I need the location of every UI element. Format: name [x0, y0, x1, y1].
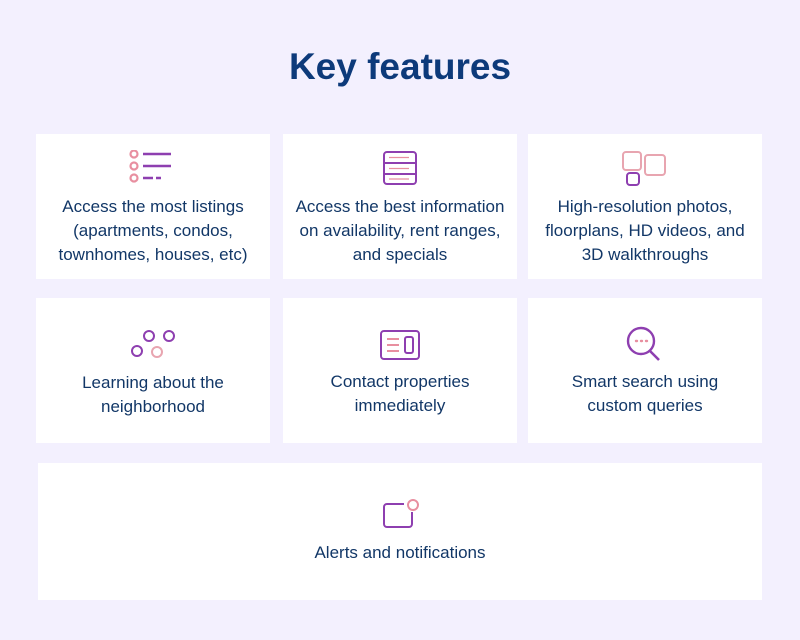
panel: neighborhood	[36, 298, 270, 443]
text	[82, 373, 224, 416]
icon: notification	[383, 499, 419, 528]
title: Key features	[289, 46, 511, 87]
icon: magnifier	[626, 326, 660, 361]
text: floorplans, HD videos, and	[545, 221, 745, 240]
panel: information	[283, 134, 517, 279]
text	[296, 197, 504, 264]
text	[58, 197, 247, 264]
text	[572, 372, 718, 415]
panel: alerts	[38, 463, 762, 600]
text: Learning about the	[82, 373, 224, 392]
icon: gallery	[622, 151, 666, 186]
icon: list	[129, 150, 171, 183]
text: (apartments, condos,	[73, 221, 233, 240]
text: Access the best information	[296, 197, 504, 216]
text: immediately	[355, 396, 445, 415]
text: Contact properties	[331, 372, 469, 391]
text: High-resolution photos,	[558, 197, 732, 216]
panel: contact	[283, 298, 517, 443]
text: Alerts and notifications	[314, 543, 486, 562]
text: Access the most listings	[62, 197, 244, 216]
text: custom queries	[587, 396, 703, 415]
text: and specials	[353, 245, 447, 264]
icon: server	[383, 151, 417, 185]
text: 3D walkthroughs	[582, 245, 708, 264]
panel: photos	[528, 134, 762, 279]
text: Smart search using	[572, 372, 718, 391]
text	[331, 372, 469, 415]
icon: circles	[131, 330, 175, 358]
panel: search	[528, 298, 762, 443]
icon: card	[380, 330, 420, 360]
text: neighborhood	[101, 397, 205, 416]
text: on availability, rent ranges,	[300, 221, 500, 240]
panel: listings	[36, 134, 270, 279]
text	[545, 197, 745, 264]
text: townhomes, houses, etc)	[58, 245, 247, 264]
